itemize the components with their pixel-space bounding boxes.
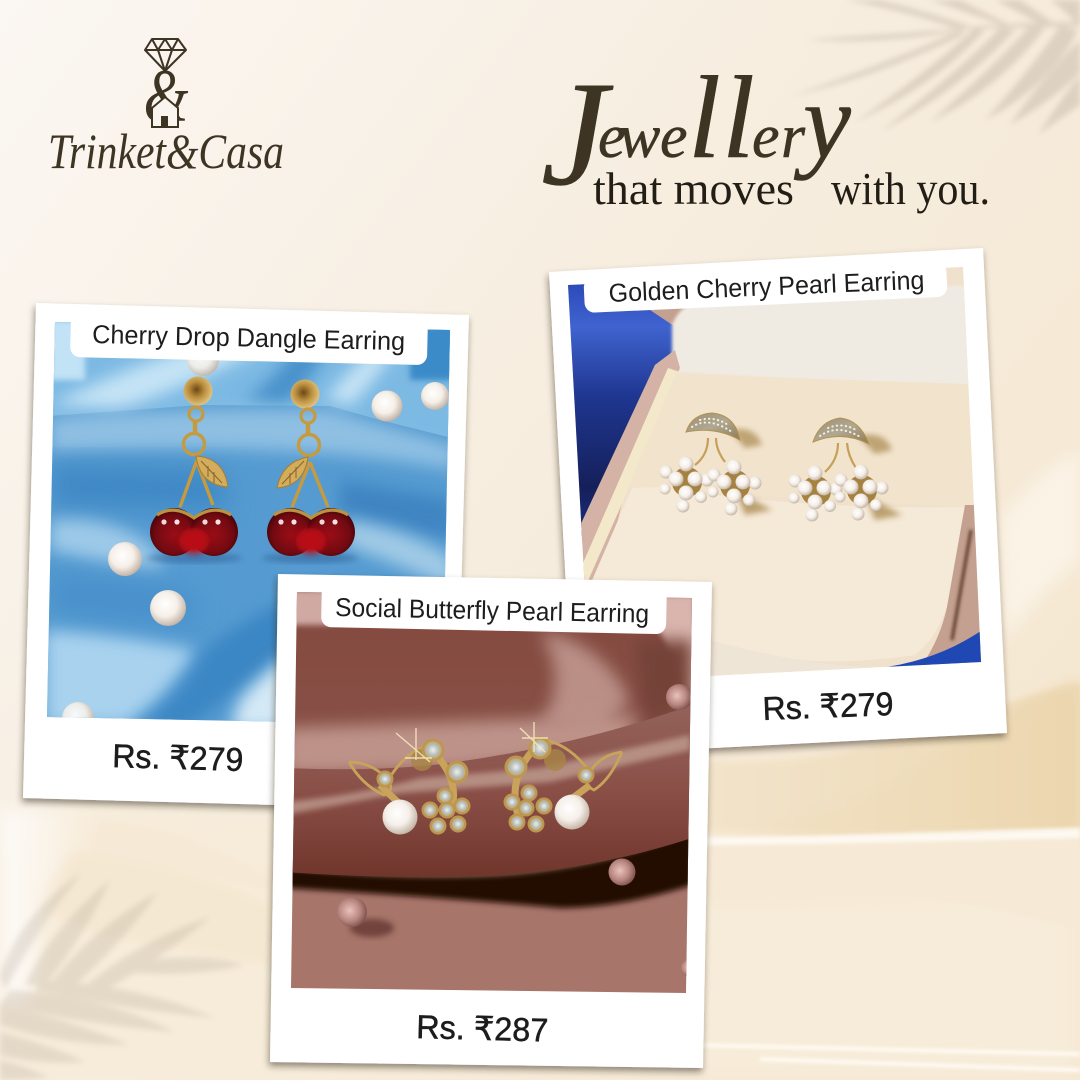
script word: Jewellery: e xyxy=(660,103,688,171)
script word: Jewellery: r xyxy=(781,103,806,171)
script word: Jewellery: y xyxy=(793,62,851,181)
earring: cherry right xyxy=(262,380,358,563)
logo wordmark: Trinket&Casa xyxy=(48,123,284,179)
script word: Jewellery: l xyxy=(722,52,755,183)
earring: cherry left xyxy=(146,376,242,563)
product name: Golden Cherry Pearl Earring xyxy=(608,265,925,308)
script word: Jewellery: w xyxy=(619,103,660,171)
photo: blue satin xyxy=(40,315,460,735)
palm shadow: top right xyxy=(792,0,1080,135)
earring: butterfly left xyxy=(349,728,470,834)
product name: Social Butterfly Pearl Earring xyxy=(335,592,649,629)
panel: Social Butterfly Pearl Earring card xyxy=(270,574,712,1068)
earring: pearl cherry left xyxy=(660,413,772,516)
icon: house xyxy=(152,97,178,127)
name tab xyxy=(583,262,948,313)
palm shadow: bottom left xyxy=(0,872,245,1080)
price: Rs. ₹279 xyxy=(112,737,244,778)
panel: Golden Cherry Pearl Earring card xyxy=(549,248,1007,755)
name tab xyxy=(321,582,667,634)
tagline left: that moves xyxy=(593,163,794,214)
earring: pearl cherry right xyxy=(788,418,902,522)
panel: Cherry Drop Dangle Earring card xyxy=(23,303,469,810)
price: Rs. ₹279 xyxy=(762,685,894,727)
photo: rose satin xyxy=(285,585,699,1000)
card base xyxy=(270,574,712,1068)
product name: Cherry Drop Dangle Earring xyxy=(92,319,405,356)
logo: Trinket&Casa xyxy=(48,39,284,179)
headline xyxy=(541,51,990,217)
beads xyxy=(337,684,699,977)
earring: butterfly right xyxy=(504,722,622,832)
tagline right: with you. xyxy=(831,163,990,214)
script word: Jewellery: l xyxy=(688,52,721,183)
icon: diamond xyxy=(145,39,186,71)
price: Rs. ₹287 xyxy=(416,1008,549,1049)
icon: ampersand: & xyxy=(144,54,188,138)
card base xyxy=(23,303,469,810)
script word: Jewellery: e xyxy=(598,103,626,171)
script word: Jewellery: e xyxy=(752,103,780,171)
script word: Jewellery: J xyxy=(541,51,614,217)
photo: jewellery box xyxy=(560,260,990,690)
pearls on satin xyxy=(62,344,449,734)
name tab xyxy=(70,312,428,365)
card base xyxy=(549,248,1007,755)
